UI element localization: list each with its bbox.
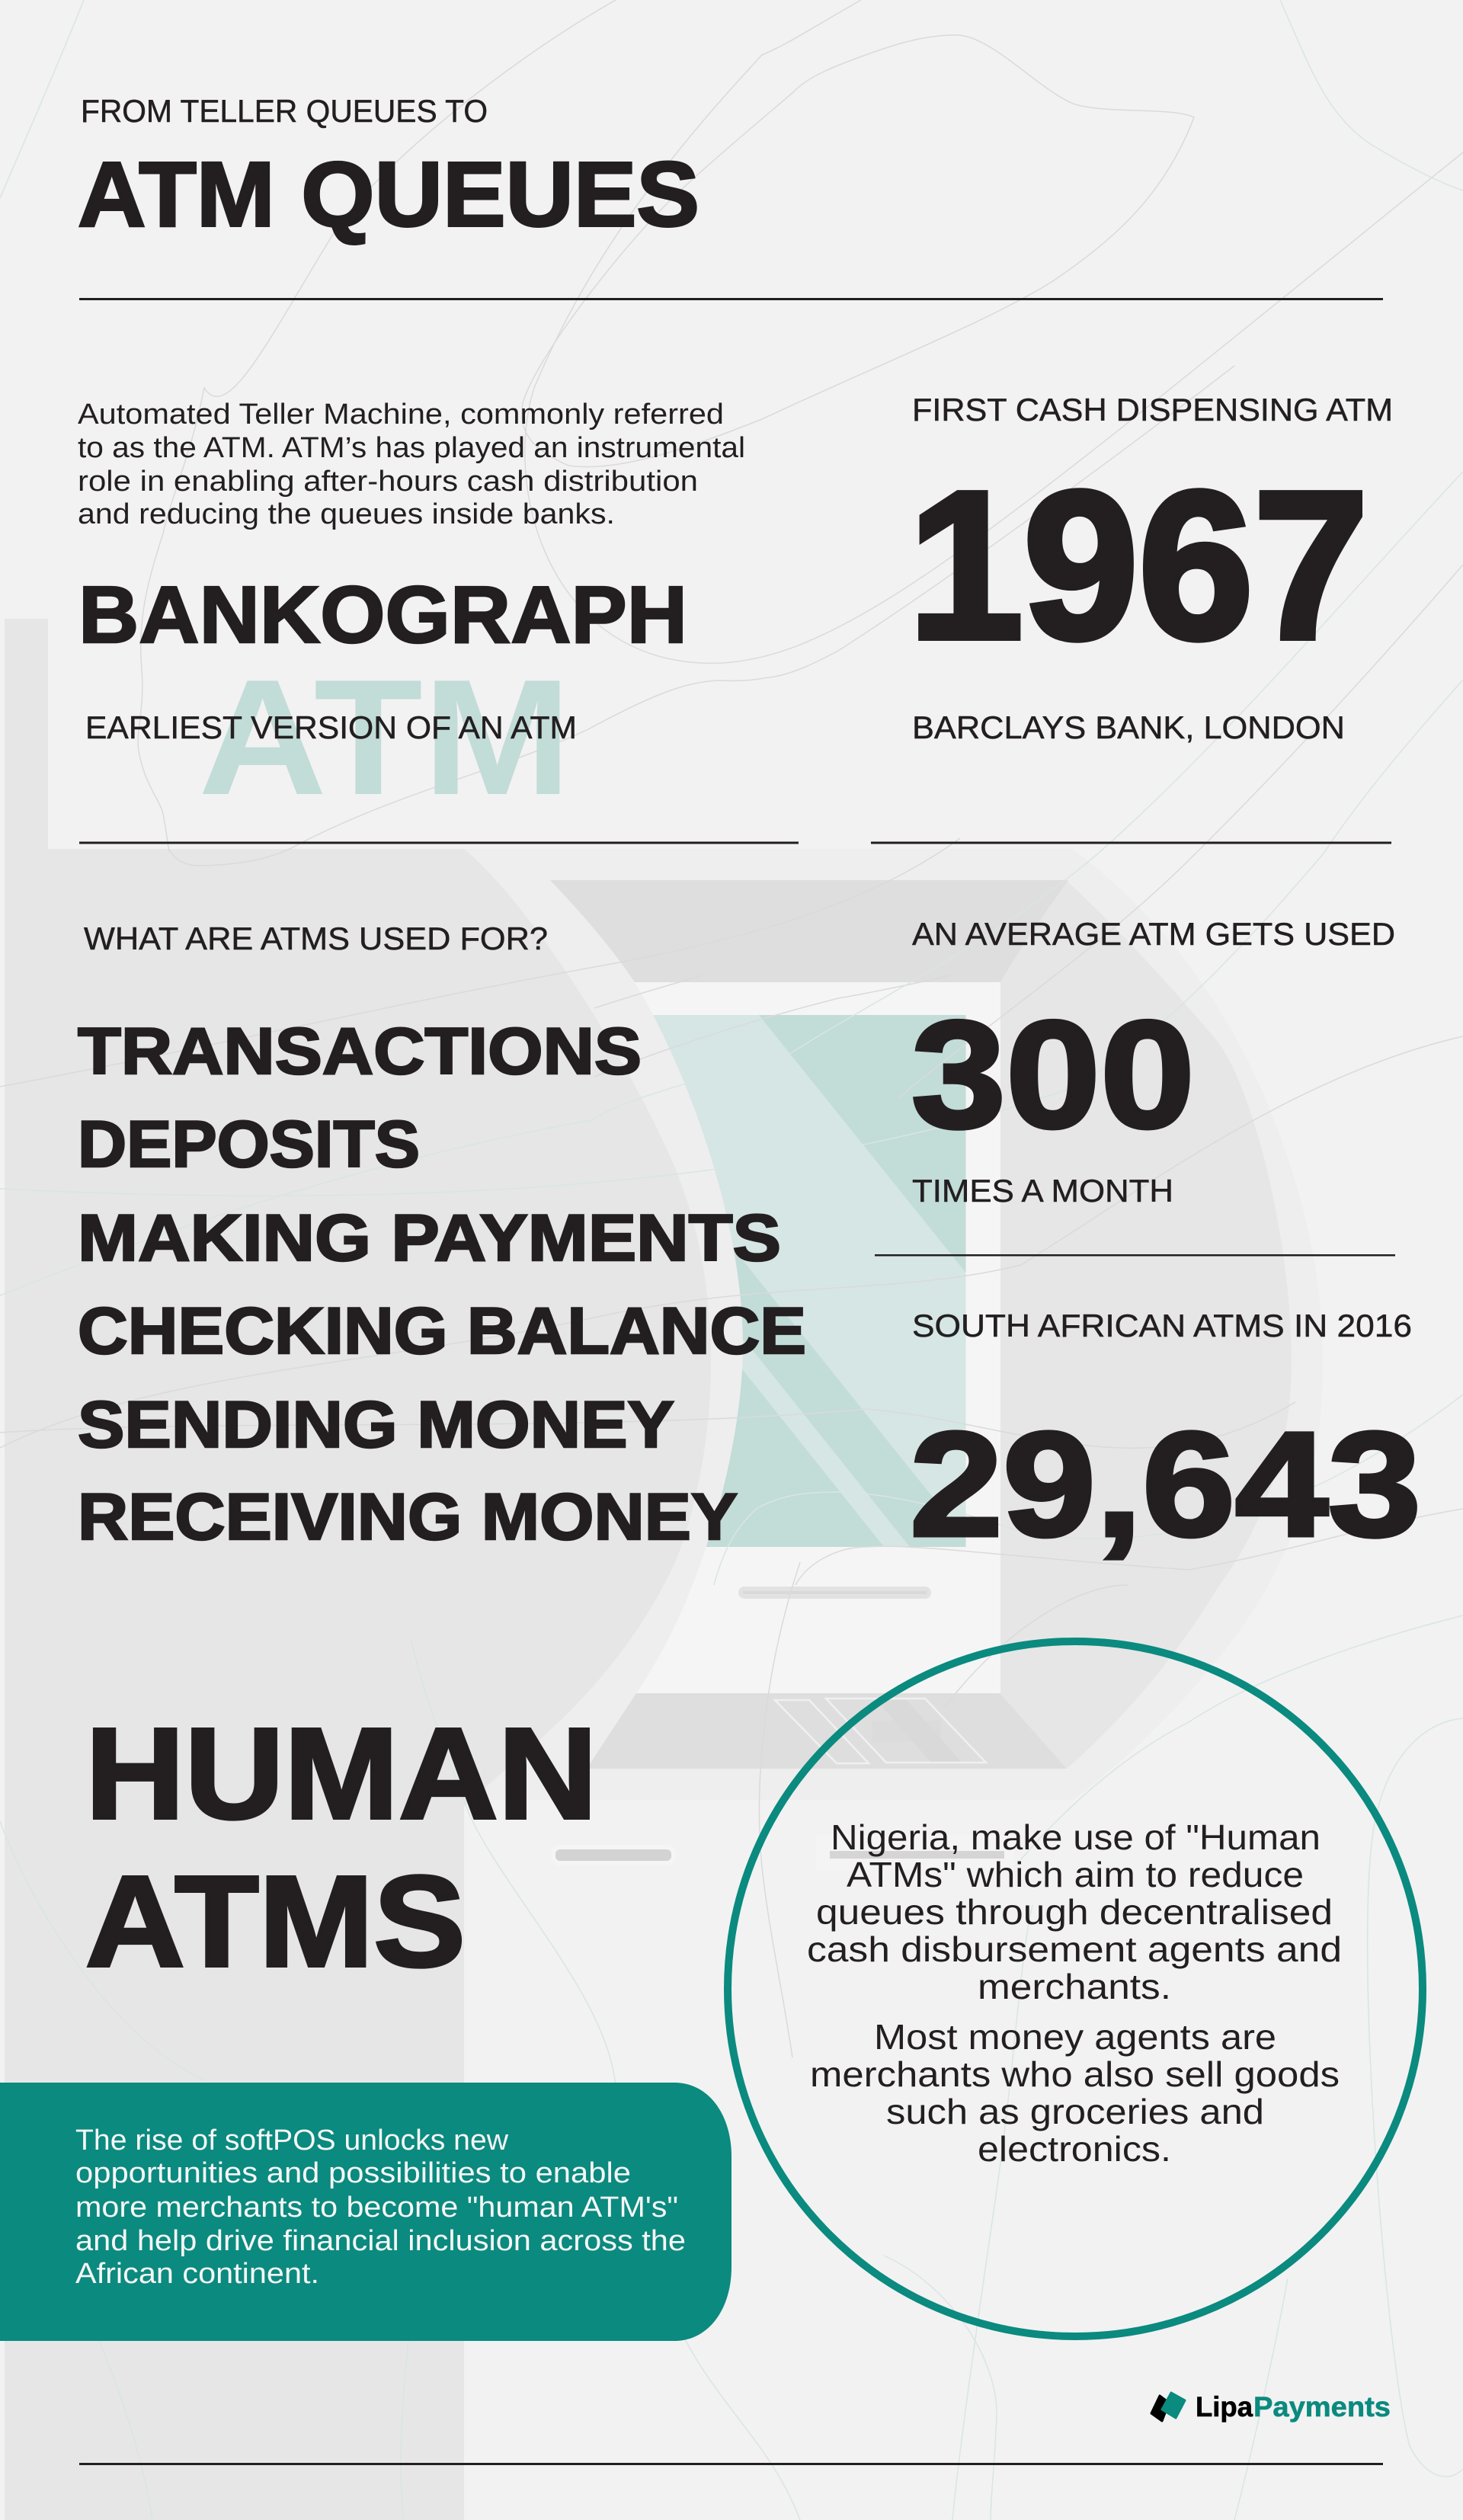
bankograph heading: BANKOGRAPH (78, 570, 687, 660)
human atms heading (85, 1702, 597, 1994)
circle text: such as groceries and (886, 2092, 1264, 2131)
uses list: DEPOSITS (78, 1108, 420, 1181)
watermark: ATM: ATM (198, 645, 571, 829)
number 29,643: 29,643 (910, 1401, 1421, 1567)
number 1967: 1967 (908, 448, 1369, 683)
panel: Nigeria circle (728, 1641, 1423, 2336)
panel: softPOS callout: African continent. (75, 2258, 319, 2290)
usage stat (911, 916, 1395, 1209)
circle text: cash disbursement agents and (807, 1929, 1342, 1969)
label: AN AVERAGE ATM GETS USED (912, 916, 1395, 952)
circle text: merchants who also sell goods (810, 2054, 1340, 2094)
caption: BARCLAYS BANK, LONDON (912, 709, 1345, 745)
main title: ATM QUEUES (78, 142, 699, 245)
ATM outer housing (464, 849, 1323, 1800)
ATM left side panel (5, 619, 711, 2520)
circle text (807, 1817, 1342, 2169)
panel: softPOS callout: opportunities and possibilities to enable (75, 2157, 631, 2189)
wordmark: Lipa (1196, 2391, 1253, 2422)
intro paragraph: and reducing the queues inside banks. (78, 498, 615, 530)
logo: LipaPayments (1151, 2391, 1391, 2422)
uses list: TRANSACTIONS (78, 1015, 642, 1088)
icon: cards (1151, 2393, 1185, 2421)
circle text: Nigeria, make use of "Human (831, 1817, 1321, 1857)
human atms heading: HUMAN (85, 1702, 597, 1846)
ATM screen (640, 1015, 966, 1547)
intro paragraph: role in enabling after-hours cash distribution (78, 466, 698, 498)
divider left (79, 841, 799, 844)
panel: softPOS callout: more merchants to become "human ATM's" (75, 2192, 678, 2224)
intro paragraph: to as the ATM. ATM’s has played an instrumental (78, 432, 745, 464)
panel: softPOS callout: and help drive financial inclusion across the (75, 2225, 686, 2257)
divider bottom (79, 2463, 1383, 2465)
top heading (78, 93, 699, 245)
circle outline (728, 1641, 1423, 2336)
ATM right side panel (983, 880, 1292, 1769)
ATM top hood (550, 880, 1068, 982)
south africa stat (910, 1308, 1421, 1567)
background: large ATM illustration (5, 619, 1323, 2520)
panel: softPOS callout (0, 2083, 732, 2341)
divider stat (875, 1254, 1395, 1256)
bankograph caption: EARLIEST VERSION OF AN ATM (85, 709, 577, 745)
intro paragraph: Automated Teller Machine, commonly referred (78, 399, 724, 431)
kicker: FROM TELLER QUEUES TO (81, 93, 488, 129)
panel: softPOS callout: The rise of softPOS unlocks new (75, 2125, 509, 2157)
logo: LipaPayments: Payments (1253, 2391, 1391, 2422)
circle text: queues through decentralised (816, 1892, 1333, 1932)
caption: TIMES A MONTH (912, 1173, 1173, 1209)
ATM card slot (738, 1587, 931, 1599)
uses list (78, 921, 806, 1554)
uses list: CHECKING BALANCE (78, 1295, 806, 1368)
uses list: MAKING PAYMENTS (78, 1202, 781, 1275)
circle text: ATMs" which aim to reduce (847, 1855, 1304, 1894)
label: SOUTH AFRICAN ATMS IN 2016 (912, 1308, 1412, 1343)
label: FIRST CASH DISPENSING ATM (912, 392, 1393, 427)
ATM body (635, 982, 1000, 1693)
ATM keypad shelf (587, 1693, 1067, 1769)
circle text: Most money agents are (874, 2017, 1276, 2057)
ATM small bar right (816, 1835, 1014, 1870)
first atm stat (908, 392, 1393, 745)
human atms heading: ATMS (85, 1849, 466, 1994)
number 300: 300 (911, 990, 1195, 1160)
ATM small bar left (551, 1845, 676, 1865)
intro paragraph (78, 399, 745, 530)
divider top (79, 298, 1383, 300)
circle text: electronics. (978, 2129, 1171, 2169)
uses list: SENDING MONEY (78, 1388, 674, 1462)
circle text: merchants. (978, 1967, 1171, 2006)
divider right (871, 841, 1391, 844)
uses list: RECEIVING MONEY (78, 1481, 738, 1554)
list heading: WHAT ARE ATMS USED FOR? (84, 921, 548, 956)
